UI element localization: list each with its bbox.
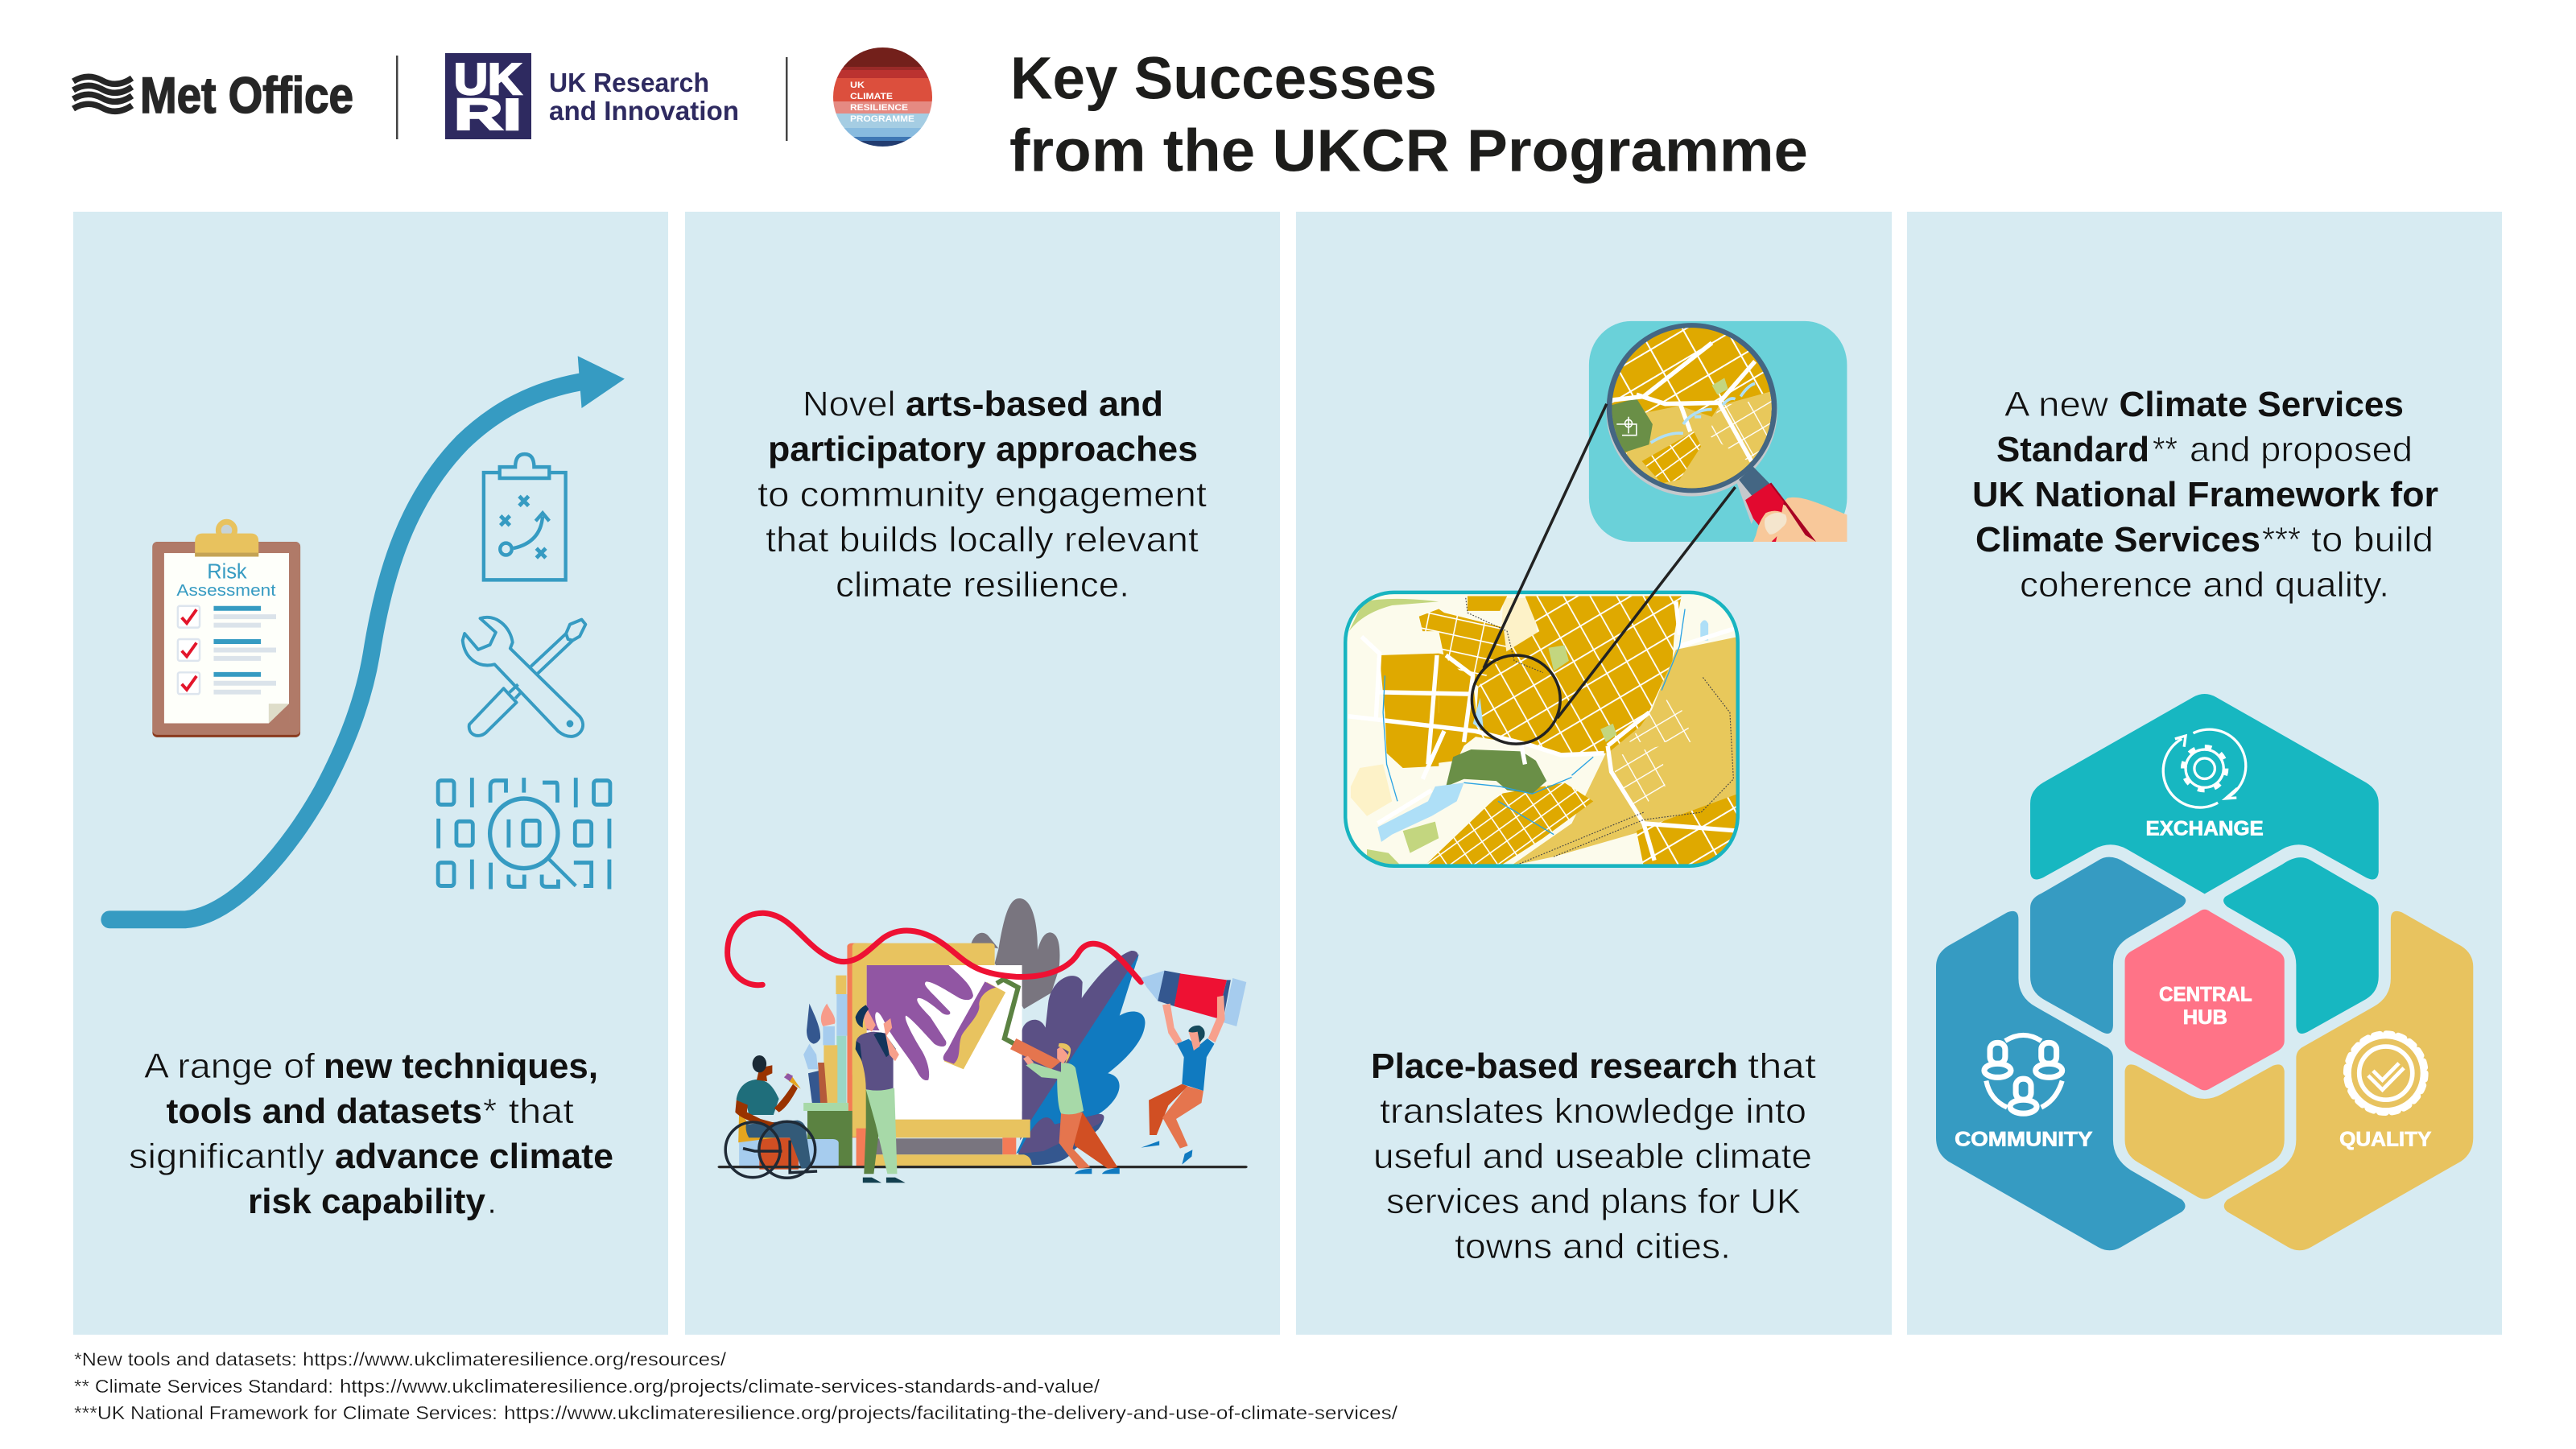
logo: UKRI: [445, 53, 739, 139]
text block: panel 4: UK National Framework for: [1972, 475, 2438, 514]
text block: panel 4: to build: [2311, 520, 2434, 559]
text block: panel 1: significantly: [129, 1137, 324, 1176]
text block: panel 4: and proposed: [2190, 430, 2413, 469]
segment: exchange: [2030, 694, 2379, 1034]
magnifier inset: [1589, 321, 1847, 542]
person: paint roller: [1023, 1043, 1120, 1174]
text block: panel 3: services and plans for UK: [1386, 1182, 1801, 1221]
text block: panel 2: climate resilience.: [836, 565, 1129, 605]
footnotes: ** Climate Services Standard:: [74, 1376, 333, 1397]
logo: UK Climate Resilience Programme: PROGRAMME: [850, 114, 914, 124]
brush pot: [739, 976, 852, 1170]
text block: panel 4: [1972, 385, 2438, 605]
segment: community: COMMUNITY: [1955, 1129, 2092, 1151]
text block: panel 2: Novel: [803, 385, 895, 424]
logo: UK Climate Resilience Programme: RESILIENCE: [850, 103, 908, 113]
footnotes: ***UK National Framework for Climate Services:: [74, 1402, 497, 1423]
text block: panel 1: advance climate: [335, 1137, 613, 1176]
logo: UK Climate Resilience Programme: CLIMATE: [850, 92, 893, 101]
text block: panel 2: [758, 385, 1207, 605]
text block: panel 4: Climate Services: [1975, 520, 2260, 559]
segment: central hub: HUB: [2183, 1007, 2227, 1029]
icon: binary data magnifier: [438, 778, 610, 889]
foliage: [972, 898, 1145, 1165]
logo: UKRI: UK Research: [549, 68, 709, 97]
paint line: [728, 913, 1141, 985]
text block: panel 1: risk capability: [248, 1182, 486, 1221]
logo: Met Office: [73, 68, 353, 124]
footnotes: https://www.ukclimateresilience.org/resources/: [303, 1349, 727, 1370]
logo: UKRI: and Innovation: [549, 96, 739, 126]
hexagon framework diagram: [1936, 694, 2473, 1250]
text block: panel 3: translates knowledge into: [1380, 1092, 1806, 1131]
logo: UKRI: UK: [454, 54, 522, 104]
person: standing with raised hand: [856, 1005, 906, 1183]
logo: UK Climate Resilience Programme: UK: [850, 80, 865, 90]
text block: panel 2: arts-based and: [906, 385, 1163, 424]
text block: panel 3: towns and cities.: [1455, 1227, 1731, 1266]
footnotes: [74, 1349, 1398, 1423]
ground line: [718, 1166, 1248, 1168]
zoom connector lines: [1472, 404, 1736, 744]
illustration: community arts scene: [718, 898, 1248, 1183]
panel: place-based research: [1296, 212, 1892, 1335]
segment: central hub: [2125, 910, 2285, 1090]
icon: strategy clipboard: [484, 454, 566, 580]
icon: risk assessment clipboard: Risk: [207, 560, 247, 583]
title: [1009, 45, 1808, 184]
easel and canvas: [847, 943, 1061, 1166]
text block: panel 2: that builds locally relevant: [766, 520, 1199, 559]
map illustration: [1345, 321, 1847, 866]
text block: panel 3: Place-based research: [1371, 1046, 1738, 1086]
segment: exchange: EXCHANGE: [2145, 818, 2264, 840]
panel: techniques, tools and datasets: [73, 212, 668, 1335]
icon: risk assessment clipboard: [152, 522, 300, 737]
text block: panel 3: useful and useable climate: [1373, 1137, 1812, 1176]
icon: risk assessment clipboard: Assessment: [176, 582, 276, 600]
text block: panel 4: coherence and quality.: [2020, 565, 2389, 605]
text block: panel 1: .: [487, 1182, 497, 1221]
text block: panel 4: A new: [2004, 385, 2108, 424]
growth arrow and icons: [109, 356, 625, 919]
title: Key Successes: [1010, 45, 1437, 112]
segment: quality: QUALITY: [2339, 1129, 2431, 1151]
text block: panel 3: that: [1748, 1046, 1816, 1086]
person: holding paint tube: [1141, 971, 1246, 1165]
panel: arts-based approaches: [685, 212, 1280, 1335]
text block: panel 4: **: [2153, 430, 2178, 469]
panel: climate services standard: [1907, 212, 2502, 1335]
text block: panel 1: new techniques,: [324, 1046, 598, 1086]
text block: panel 1: tools and datasets: [166, 1092, 482, 1131]
text block: panel 2: to community engagement: [758, 475, 1207, 514]
logo: UKRI: RI: [454, 89, 522, 139]
icon: wrench and screwdriver: [463, 617, 585, 737]
segment: community: [1936, 857, 2186, 1250]
footnotes: *New tools and datasets:: [74, 1349, 297, 1370]
text block: panel 4: ***: [2262, 520, 2301, 559]
footnotes: https://www.ukclimateresilience.org/projects/facilitating-the-delivery-and-use-of-climate-services/: [504, 1402, 1398, 1423]
text block: panel 1: that: [509, 1092, 574, 1131]
text block: panel 1: [129, 1046, 613, 1221]
logo: Met Office: Met Office: [140, 68, 353, 124]
arrow: rising curve: [109, 356, 625, 919]
text block: panel 2: participatory approaches: [768, 430, 1198, 469]
person: wheelchair user: [725, 1055, 817, 1178]
text block: panel 3: [1371, 1046, 1816, 1266]
segment: central hub: CENTRAL: [2159, 984, 2252, 1005]
segment: quality: [2125, 911, 2473, 1250]
text block: panel 1: A range of: [144, 1046, 316, 1086]
text block: panel 4: Standard: [1996, 430, 2149, 469]
footnotes: https://www.ukclimateresilience.org/projects/climate-services-standards-and-value/: [340, 1376, 1100, 1397]
text block: panel 4: Climate Services: [2119, 385, 2404, 424]
text block: panel 1: *: [483, 1092, 497, 1131]
logo: UK Climate Resilience Programme: [833, 47, 932, 147]
city map: [1345, 592, 1738, 866]
header logos: [73, 44, 938, 148]
title: from the UKCR Programme: [1009, 118, 1808, 184]
